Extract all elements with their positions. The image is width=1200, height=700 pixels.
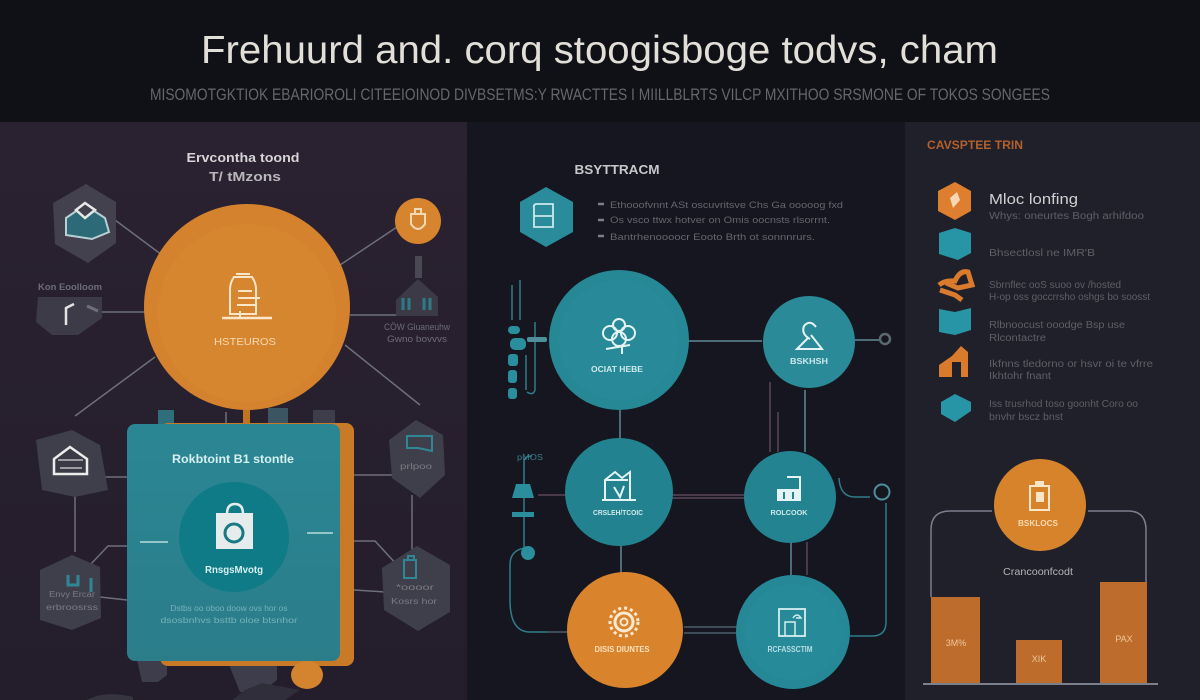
icon: cluster bbox=[603, 319, 635, 354]
bullet list: Bantrhenoooocr Eooto Brth ot sonnnrurs. bbox=[610, 232, 815, 243]
list item 1 bbox=[938, 182, 1144, 222]
icon: hex left bottom: Envy Ercar bbox=[49, 589, 95, 599]
icon: bag bbox=[216, 504, 253, 549]
list item 3: H-op oss goccrrsho oshgs bo soosst bbox=[989, 292, 1150, 303]
circle: bottom left orange bbox=[567, 572, 683, 688]
orange circle bbox=[994, 459, 1086, 551]
card heading: Rokbtoint B1 stontle bbox=[172, 452, 294, 466]
list item 3: Sbrnflec ooS suoo ov /hosted bbox=[989, 280, 1121, 291]
list item 1: Whys: oneurtes Bogh arhifdoo bbox=[989, 211, 1144, 222]
icon: teal hexagon bbox=[520, 187, 573, 247]
orange circle: BSKLOCS bbox=[1018, 519, 1059, 528]
label: left node: Kon Eoolloom bbox=[38, 282, 102, 293]
bar: right bbox=[1100, 582, 1147, 684]
list item 2 bbox=[939, 228, 1095, 260]
left panel heading: T/ tMzons bbox=[209, 169, 281, 184]
circle: top left bbox=[549, 270, 689, 410]
icon: jar bbox=[222, 274, 272, 318]
list item 3 bbox=[939, 272, 1150, 303]
list item 5: Ikfnns tledorno or hsvr oi te vfrre bbox=[989, 359, 1153, 370]
panel: header bbox=[0, 0, 1200, 122]
stem bbox=[243, 410, 250, 426]
list item 1: Mloc lonfing bbox=[989, 191, 1078, 208]
left doodle blobs bbox=[508, 326, 547, 560]
circle: bottom right: RCFASSCTIM bbox=[768, 645, 813, 654]
bullet list: Ethooofvnnt ASt oscuvritsve Chs Ga ooooog fxd bbox=[610, 200, 843, 211]
card circle label: RnsgsMvotg bbox=[205, 565, 263, 576]
icon: hex right bottom: Kosrs hor bbox=[391, 596, 437, 606]
connector lines bbox=[75, 220, 420, 600]
list item 5: Ikhtohr fnant bbox=[989, 371, 1051, 382]
list item 5 bbox=[939, 346, 1153, 382]
circle: top left: OCIAT HEBE bbox=[591, 364, 643, 374]
flow connectors bbox=[510, 280, 890, 636]
circle: middle left: CRSLEH/TCOIC bbox=[593, 508, 644, 517]
icon: right house node bbox=[396, 256, 438, 316]
orange back card bbox=[160, 423, 354, 689]
label: right node: Gwno bovvvs bbox=[387, 334, 448, 344]
left panel heading bbox=[186, 150, 300, 184]
icon: left node glyph bbox=[36, 297, 102, 335]
dashes bbox=[140, 533, 333, 542]
bar: left bbox=[931, 597, 980, 684]
label: right node bbox=[384, 322, 450, 344]
icon: hex right top bbox=[389, 420, 445, 498]
list item 6: bnvhr bscz bnst bbox=[989, 412, 1063, 423]
circle: middle left bbox=[565, 438, 673, 546]
icon: hex left bottom: erbroosrss bbox=[46, 602, 98, 612]
list item 6 bbox=[941, 394, 1138, 423]
circle: bottom left orange: DISIS DIUNTES bbox=[594, 644, 650, 654]
bar: middle bbox=[1016, 640, 1062, 684]
bar: middle: XIK bbox=[1032, 654, 1046, 664]
small doodle label: pMOS bbox=[517, 453, 543, 462]
panel: left hub bbox=[0, 122, 467, 700]
circle: bottom right bbox=[736, 575, 850, 689]
title: Frehuurd and. corq stoogisboge todvs, cham bbox=[201, 29, 998, 72]
list item 4 bbox=[939, 308, 1125, 344]
icon: hex left bottom bbox=[40, 555, 101, 630]
bullet list bbox=[598, 200, 843, 243]
circle: top right: BSKHSH bbox=[790, 357, 828, 366]
list item 2: Bhsectlosl ne IMR'B bbox=[989, 247, 1095, 259]
circle: top right bbox=[763, 296, 855, 388]
icon: hex right bottom: *oooor bbox=[396, 582, 434, 592]
bullet list: Os vsco ttwx hotver on Omis oocnsts rlsorrnt. bbox=[610, 215, 830, 226]
bar: right: PAX bbox=[1115, 634, 1133, 644]
label: right node: CÖW Gluaneuhw bbox=[384, 322, 450, 332]
card description bbox=[160, 603, 298, 625]
panel: right column bbox=[905, 122, 1200, 700]
connector lines to bars bbox=[931, 511, 1146, 597]
list item 4: Rlbnoocust ooodge Bsp use bbox=[989, 320, 1125, 331]
inner teal circle bbox=[179, 482, 289, 592]
right heading: CAVSPTEE TRIN bbox=[927, 138, 1023, 152]
bar chart bbox=[923, 582, 1158, 684]
left panel heading: Ervcontha toond bbox=[186, 150, 300, 165]
icon: hexagon with cube bbox=[53, 184, 116, 263]
icon: hex left top bbox=[36, 430, 108, 497]
card description: Dstbs oo oboo doow ovs hor os bbox=[170, 603, 288, 613]
icon: hex right bottom bbox=[382, 546, 450, 631]
teal card bbox=[127, 424, 340, 661]
list item 6: Iss trusrhod toso goonht Coro oo bbox=[989, 399, 1138, 410]
center heading: BSYTTRACM bbox=[574, 162, 660, 177]
bar: left: 3M% bbox=[946, 638, 966, 648]
big orange circle bbox=[144, 204, 350, 410]
label: hub: HSTEUROS bbox=[214, 336, 276, 348]
panel: center flow bbox=[467, 122, 905, 700]
circle: middle right: ROLCOOK bbox=[770, 508, 808, 517]
card description: dsosbnhvs bsttb oloe btsnhor bbox=[160, 615, 298, 625]
icon: hex right top: prlpoo bbox=[400, 462, 433, 471]
circle: middle right bbox=[744, 451, 836, 543]
list item 4: Rlcontactre bbox=[989, 333, 1046, 344]
gray node blocks behind card bbox=[87, 408, 335, 700]
icon: small orange circle bbox=[395, 198, 441, 244]
chart label: Crancoonfcodt bbox=[1003, 566, 1073, 578]
